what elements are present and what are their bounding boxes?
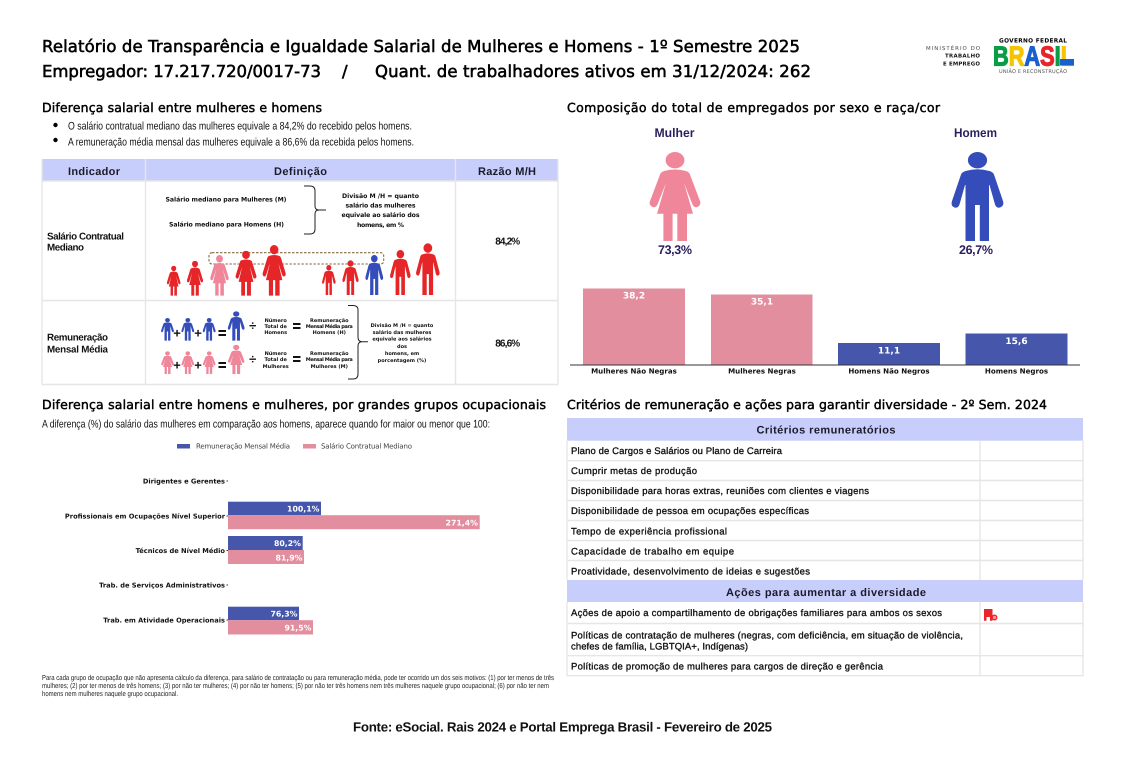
bar chart: grupos: Técnicos de Nível Médio: [136, 547, 225, 555]
footnote: mulheres; (2) por ter menos de três homens; (3) por não ter mulheres; (4) por não ter homens; (5) por não ter três homens nem três mulheres naquele grupo ocupacional; (6) por não ter nem: [42, 681, 549, 690]
report title: Relatório de Transparência e Igualdade Salarial de Mulheres e Homens - 1º Semestre 2025: [42, 37, 800, 56]
heading: grupos ocupacionais: Diferença salarial entre homens e mulheres, por grandes grupos ocupacionais: [42, 397, 546, 412]
icons: soma de mulheres: ÷: [249, 352, 256, 366]
row: salário contratual mediano: Mediano: [47, 242, 84, 254]
logo: ministério e governo federal: E EMPREGO: [943, 62, 980, 68]
logo: ministério e governo federal: TRABALHO: [945, 54, 980, 60]
bar chart: grupos: 100,1%: [287, 504, 320, 514]
table: critérios e ações: chefes de família, LGBTQIA+, Indígenas): [571, 642, 748, 652]
row: remuneração mensal média: homens, em: [385, 351, 419, 357]
bar chart: grupos: [65, 478, 480, 634]
panel: diferença salarial: [42, 100, 558, 384]
report title: /: [342, 62, 348, 81]
bullet points: [53, 120, 414, 148]
bar chart: raça/cor: 11,1: [878, 346, 900, 356]
bar chart: grupos: Trab. de Serviços Administrativos: [99, 582, 225, 590]
panel: grupos ocupacionais: [42, 397, 554, 698]
panel: critérios e ações: [567, 397, 1083, 676]
row: salário contratual mediano: salário das mulheres: [346, 202, 416, 210]
table: critérios e ações: Critérios remuneratórios: [756, 424, 896, 436]
table: critérios e ações: Tempo de experiência profissional: [571, 526, 727, 538]
legend: [177, 442, 412, 450]
icons: soma de mulheres: [161, 345, 256, 374]
table: critérios e ações: Disponibilidade de pessoa em ocupações específicas: [571, 506, 809, 517]
table: critérios e ações: Plano de Cargos e Salários ou Plano de Carreira: [571, 446, 783, 457]
icon: mulher 73,3%: 73,3%: [658, 243, 692, 257]
row: remuneração mensal média: Mulheres: [263, 364, 289, 370]
logo: ministério e governo federal: GOVERNO FEDERAL: [999, 37, 1067, 44]
row: remuneração mensal média: Total de: [265, 324, 287, 330]
icons: soma de homens: +: [194, 326, 202, 340]
row: salário contratual mediano: equivale ao salário dos: [342, 212, 420, 219]
bar chart: raça/cor: Mulheres Negras: [728, 366, 796, 376]
legend: Salário Contratual Mediano: [321, 442, 412, 450]
table: critérios e ações: Ações para aumentar a diversidade: [726, 587, 926, 599]
footnote: [42, 673, 554, 698]
row: salário contratual mediano: Salário mediano para Mulheres (M): [166, 196, 287, 204]
heading: composição: Composição do total de empregados por sexo e raça/cor: [567, 100, 941, 115]
icon: mulher 73,3%: Mulher: [654, 126, 695, 140]
table: indicadores: [42, 159, 558, 384]
table: indicadores: Razão M/H: [478, 166, 536, 178]
row: salário contratual mediano: Divisão M /H = quanto: [342, 193, 419, 200]
row: remuneração mensal média: Mensal Média para: [306, 357, 353, 363]
table: critérios e ações: Cumprir metas de produção: [571, 466, 697, 477]
table: critérios e ações: Políticas de contratação de mulheres (negras, com deficiência, em situação de violência,: [571, 630, 963, 642]
bar chart: grupos: 80,2%: [274, 539, 301, 548]
row: remuneração mensal média: Remuneração: [310, 318, 349, 324]
row: salário contratual mediano: Salário mediano para Homens (H): [169, 222, 284, 228]
footnote: homens nem mulheres naquele grupo ocupacional.: [42, 689, 178, 698]
row: remuneração mensal média: Mensal Média para: [306, 324, 353, 330]
bar chart: raça/cor: Homens Negros: [985, 366, 1048, 376]
row: remuneração mensal média: equivale aos salários: [372, 337, 432, 343]
row: remuneração mensal média: 86,6%: [495, 338, 520, 350]
row: remuneração mensal média: salário das mulheres: [373, 330, 431, 336]
report title: Quant. de trabalhadores ativos em 31/12/2024: 262: [375, 62, 811, 81]
logo: ministério e governo federal: UNIÃO E RECONSTRUÇÃO: [999, 68, 1067, 75]
row: remuneração mensal média: Divisão M /H = quanto: [371, 323, 434, 329]
panel: composição por sexo e raça/cor: [567, 100, 1080, 376]
bar chart: grupos: Dirigentes e Gerentes: [143, 478, 225, 486]
bar chart: grupos: Trab. em Atividade Operacionais: [103, 616, 225, 624]
report title: [42, 37, 811, 81]
heading: diferença salarial: Diferença salarial entre mulheres e homens: [42, 100, 322, 115]
table: indicadores: Definição: [274, 166, 327, 178]
icons: soma de mulheres: +: [173, 358, 181, 372]
bar chart: grupos: 271,4%: [446, 518, 478, 528]
table: critérios e ações: [567, 418, 1083, 676]
icon: homem 26,7%: Homem: [954, 126, 997, 140]
report title: Empregador: 17.217.720/0017-73: [42, 62, 321, 81]
row: remuneração mensal média: dos: [397, 344, 407, 350]
icon: homem 26,7%: 26,7%: [959, 243, 993, 257]
bar chart: raça/cor: Mulheres Não Negras: [591, 366, 677, 376]
icons: soma de homens: [161, 311, 256, 341]
heading: critérios: Critérios de remuneração e ações para garantir diversidade - 2º Sem. 2024: [567, 397, 1047, 412]
row: salário contratual mediano: Salário Contratual: [47, 232, 124, 242]
icon: homem 26,7%: [952, 126, 1003, 257]
bar chart: grupos: 91,5%: [284, 624, 312, 632]
table: indicadores: Indicador: [68, 166, 121, 178]
bullet points: A remuneração média mensal das mulheres equivale a 86,6% da recebida pelos homens.: [68, 136, 414, 148]
bullet points: O salário contratual mediano das mulheres equivale a 84,2% do recebido pelos homens.: [68, 120, 412, 132]
row: remuneração mensal média: porcentagem (%): [378, 358, 426, 364]
row: salário contratual mediano: [47, 186, 520, 296]
row: remuneração mensal média: [47, 306, 520, 379]
table: critérios e ações: Disponibilidade para horas extras, reuniões com clientes e viagens: [571, 486, 869, 497]
table: critérios e ações: Políticas de promoção de mulheres para cargos de direção e gerência: [571, 662, 884, 672]
table: critérios e ações: Ações de apoio a compartilhamento de obrigações familiares para ambos os sexos: [571, 608, 942, 619]
bar chart: raça/cor: [570, 288, 1080, 376]
bar chart: raça/cor: 35,1: [751, 298, 773, 308]
logo: ministério e governo federal: BRASIL: [993, 40, 1074, 72]
icon: mulher 73,3%: [650, 126, 700, 257]
icons: pessoas em ordem de salário: [167, 243, 440, 296]
subtitle: A diferença (%) do salário das mulheres em comparação aos homens, aparece quando for maior ou menor que 100:: [42, 418, 490, 430]
logo: ministério e governo federal: MINISTÉRIO DO: [926, 45, 980, 52]
row: remuneração mensal média: Número: [265, 318, 287, 324]
table: critérios e ações: Proatividade, desenvolvimento de ideias e sugestões: [571, 566, 810, 578]
row: remuneração mensal média: Remuneração: [310, 351, 349, 357]
row: remuneração mensal média: Total de: [265, 357, 287, 363]
logo: ministério e governo federal: [926, 37, 1074, 75]
legend: Remuneração Mensal Média: [196, 442, 290, 450]
icons: soma de homens: ÷: [249, 318, 256, 333]
row: salário contratual mediano: 84,2%: [495, 236, 520, 248]
bar chart: grupos: 76,3%: [270, 610, 298, 618]
footnote: Para cada grupo de ocupação que não apresenta cálculo da diferença, para salário de contratação ou para remuneração média, pode ter ocorrido um dos seis motivos: (1) por ter menos de três: [42, 673, 554, 682]
row: remuneração mensal média: Homens: [264, 330, 287, 336]
bar chart: raça/cor: 38,2: [623, 292, 645, 302]
icons: soma de mulheres: +: [194, 358, 202, 372]
row: salário contratual mediano: homens, em %: [357, 222, 404, 229]
bar chart: raça/cor: 15,6: [1005, 337, 1028, 347]
row: remuneração mensal média: Homens (H): [313, 330, 346, 336]
row: remuneração mensal média: Número: [265, 351, 287, 357]
row: remuneração mensal média: Remuneração: [47, 332, 108, 344]
row: remuneração mensal média: Mulheres (M): [311, 364, 348, 370]
icon: prédio com selo: [984, 609, 997, 621]
bar chart: grupos: Profissionais em Ocupações Nível Superior: [65, 512, 226, 520]
icons: soma de homens: +: [173, 326, 181, 340]
table: critérios e ações: Capacidade de trabalho em equipe: [571, 546, 734, 558]
bar chart: grupos: 81,9%: [275, 554, 303, 562]
source note: Fonte: eSocial. Rais 2024 e Portal Emprega Brasil - Fevereiro de 2025: [353, 720, 773, 734]
bar chart: raça/cor: Homens Não Negros: [848, 366, 930, 376]
row: remuneração mensal média: Mensal Média: [47, 344, 109, 356]
